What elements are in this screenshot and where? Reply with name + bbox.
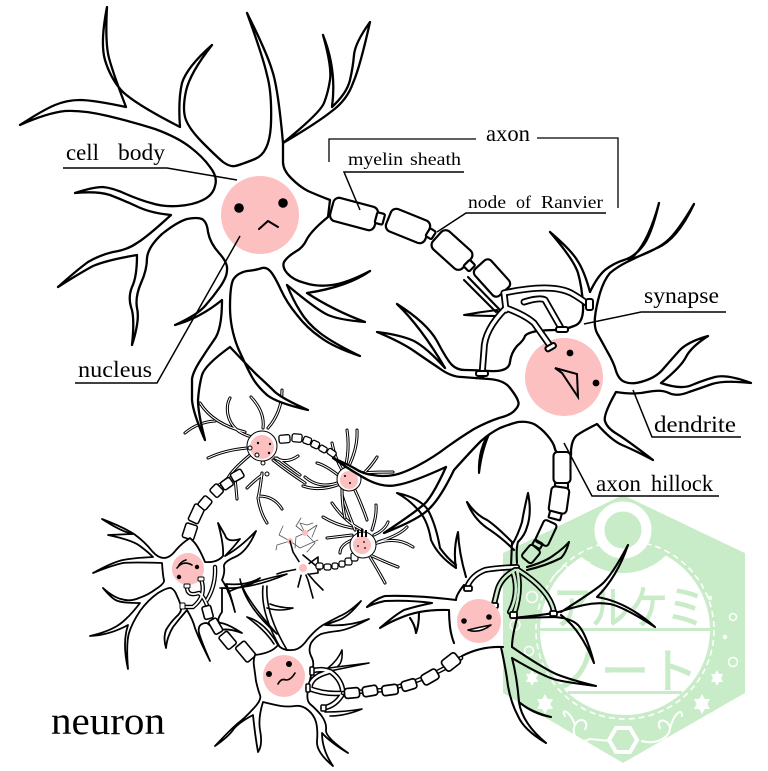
logo stamp: hexagon badge: ノート bbox=[552, 646, 698, 699]
axon chain: neuron 3 to neuron 4 bbox=[343, 652, 462, 699]
axon chain: neuron 5 to neuron 4 bbox=[202, 605, 256, 663]
label: node of Ranvier: Ranvier bbox=[541, 192, 603, 212]
neuron 7 (small, right of top) bbox=[303, 430, 393, 520]
axon terminals of neuron 1 on neuron 2 bbox=[476, 288, 593, 376]
nucleus of neuron 2 bbox=[525, 338, 603, 416]
crescent behind neuron 2 bbox=[479, 430, 491, 473]
axon of neuron 2: myelin segments bbox=[521, 452, 570, 564]
label: synapse: synapse bbox=[644, 283, 719, 308]
neuron 3 upper dendrites bbox=[467, 502, 514, 567]
neuron 5 outline bbox=[90, 519, 260, 669]
title: neuron: neuron bbox=[51, 700, 165, 743]
blade and fibre beside last myelin segment bbox=[464, 277, 500, 316]
label: axon bracket: axon bbox=[486, 121, 530, 146]
terminals on neuron 4 bbox=[306, 667, 343, 711]
label: synapse bbox=[584, 283, 726, 324]
nucleus of neuron 3 bbox=[457, 599, 501, 643]
label: dendrite: dendrite bbox=[654, 412, 736, 437]
neuron 4 (bottom centre) bbox=[215, 601, 369, 766]
neuron 4 outline bbox=[215, 601, 369, 766]
label: axon bracket bbox=[329, 121, 618, 208]
neuron 2 (large, right) bbox=[333, 203, 751, 533]
neuron 3 boutons bbox=[464, 586, 557, 618]
neuron 1 outline bbox=[20, 7, 370, 440]
label: cell body bbox=[63, 140, 237, 180]
axon of neuron 1: myelin segments bbox=[329, 196, 512, 299]
logo stamp: hexagon badge: アルケミ bbox=[553, 582, 705, 634]
terminals on neuron 5 bbox=[180, 567, 215, 609]
tiny faint neurons bbox=[276, 518, 318, 552]
label: cell body: body bbox=[118, 140, 166, 165]
neuron 3 (right, over the logo) bbox=[367, 493, 655, 743]
nucleus of neuron 1 bbox=[221, 176, 299, 254]
label: node of Ranvier bbox=[437, 192, 606, 232]
label: node of Ranvier: node bbox=[468, 192, 506, 212]
axon chain: neuron 5 to neuron 6 bbox=[182, 469, 245, 540]
neuron 3 terminals bbox=[467, 567, 517, 587]
label: dendrite bbox=[633, 390, 741, 437]
neuron 8 (small, centre) bbox=[323, 495, 413, 583]
label: nucleus: nucleus bbox=[78, 357, 152, 382]
boutons bbox=[476, 299, 593, 376]
crossing blades near neuron 4 bbox=[220, 574, 293, 650]
label: myelin sheath: myelin bbox=[348, 149, 403, 169]
terminal boutons on neuron 6 bbox=[248, 446, 269, 476]
label: nucleus bbox=[75, 236, 240, 383]
axon chain of neuron 6 bbox=[279, 434, 337, 458]
label: myelin sheath bbox=[344, 149, 464, 210]
neuron 3 right dendrites bbox=[512, 545, 655, 627]
label: myelin sheath: sheath bbox=[410, 149, 461, 169]
neuron 5 (medium, left) bbox=[90, 519, 260, 669]
neuron 2 outline bbox=[333, 203, 751, 533]
neuron 3 left and top outline bbox=[462, 647, 503, 656]
label: axon hillock: axon bbox=[596, 471, 641, 496]
nucleus of neuron 4 bbox=[263, 655, 305, 697]
blades at right of neuron 4 bbox=[315, 663, 369, 671]
label: axon hillock bbox=[564, 443, 719, 496]
logo stamp: hexagon badge bbox=[503, 495, 745, 763]
neuron 9 with chain bbox=[277, 541, 358, 598]
neuron 6 (small, top) bbox=[185, 390, 337, 523]
label: axon hillock: hillock bbox=[651, 471, 713, 496]
small neuron 9 cluster (smallest) bbox=[276, 518, 358, 598]
label: cell body: cell bbox=[66, 140, 99, 165]
label: node of Ranvier: of bbox=[516, 192, 531, 212]
nucleus of neuron 5 bbox=[172, 553, 204, 585]
neuron 1 (large, top left) bbox=[20, 7, 370, 440]
